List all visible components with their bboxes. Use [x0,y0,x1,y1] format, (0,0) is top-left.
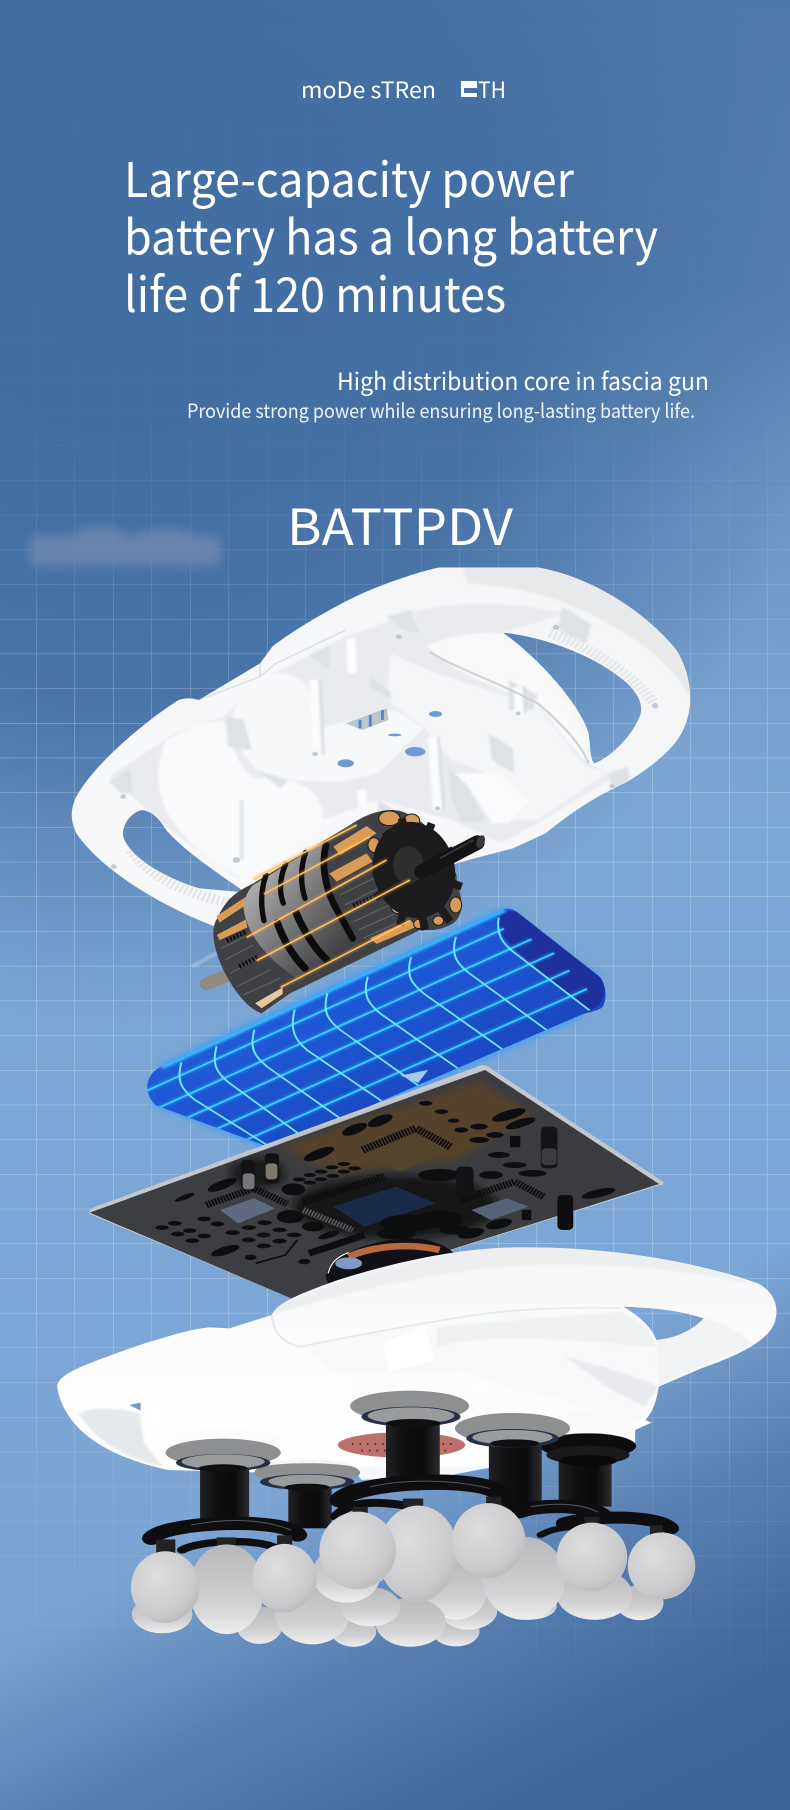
stator gear [362,812,466,930]
shadows [293,1175,499,1238]
centre vents [338,708,442,767]
title: battery has a long battery [124,198,658,268]
motor [190,810,487,1013]
circuit board [89,1065,663,1299]
sleeve slots [262,845,353,968]
chip: top [362,1128,451,1172]
centre-left dome [231,673,316,770]
light lines [247,825,410,987]
subtitle: Provide strong power while ensuring long-lasting battery life. [187,395,695,424]
screw [673,1382,687,1388]
top label: TH [478,73,506,105]
lid shading [277,1247,763,1313]
right panel [387,653,607,820]
core ribs [218,868,407,995]
screw bosses [111,625,658,869]
right shaft [422,843,477,872]
hub 4 [455,1393,570,1512]
copper patches [217,826,417,944]
copper vent [338,1432,465,1458]
title [124,141,658,326]
hub 5 [534,1410,636,1507]
warm glow [281,1080,534,1173]
chip: right [459,1182,544,1220]
top label: moDe sTRen [301,73,436,105]
right dome [427,633,589,763]
post shadows [242,680,525,860]
lower plate [352,1466,498,1480]
vent dots [352,1444,456,1451]
ball necks [156,1497,663,1556]
bottom shell [50,1240,790,1528]
lid seam [272,1308,621,1347]
subtitle: High distribution core in fascia gun [337,362,709,397]
battery heading: BATTPDV [287,488,513,560]
middle balls [189,1537,632,1647]
metal sleeve [243,840,353,978]
ribbed rims [131,850,231,903]
front balls [131,1503,695,1623]
capacitors [241,1127,573,1230]
chip: left [206,1188,287,1223]
shaded facets [109,607,631,823]
cavity floor [110,605,609,846]
outer rim band [464,567,690,699]
centre plateau [260,710,422,782]
lower plateau [456,773,510,824]
neon grid [146,909,589,1148]
left gap [129,1403,141,1411]
battery end cap [499,911,604,1010]
lower body [300,1308,661,1422]
left dome [158,720,323,882]
battery notch [401,1070,428,1083]
block [383,1325,435,1372]
top label [301,73,506,105]
hub 1 [166,1428,281,1528]
hub 2 [254,1460,360,1528]
top edge glow [161,909,504,1067]
rotor under board [326,1238,455,1287]
icon: square glyph [461,81,477,97]
chip: central [303,1177,436,1230]
streak [190,945,230,968]
inner details [109,604,631,882]
rim seam [429,652,589,763]
battery [146,905,606,1152]
subtitle [187,362,709,424]
hub 3 [350,1373,470,1482]
arc highlights [192,1481,597,1530]
posts [310,638,524,810]
board top [90,1070,659,1299]
title: Large-capacity power [124,141,574,211]
left handle ribs [78,1408,163,1467]
black spring arcs [151,1481,671,1550]
small components [155,1101,617,1264]
blurred patch [30,527,220,566]
copper lobes [368,811,462,929]
top shell [60,560,713,933]
motor core [213,810,462,1013]
teeth [227,892,387,967]
massage balls [131,1497,695,1647]
left shaft [206,972,237,984]
back balls [132,1561,664,1647]
right handle inner [656,1318,753,1387]
title: life of 120 minutes [124,256,506,326]
board edge [89,1065,663,1299]
background grid [0,428,790,1666]
